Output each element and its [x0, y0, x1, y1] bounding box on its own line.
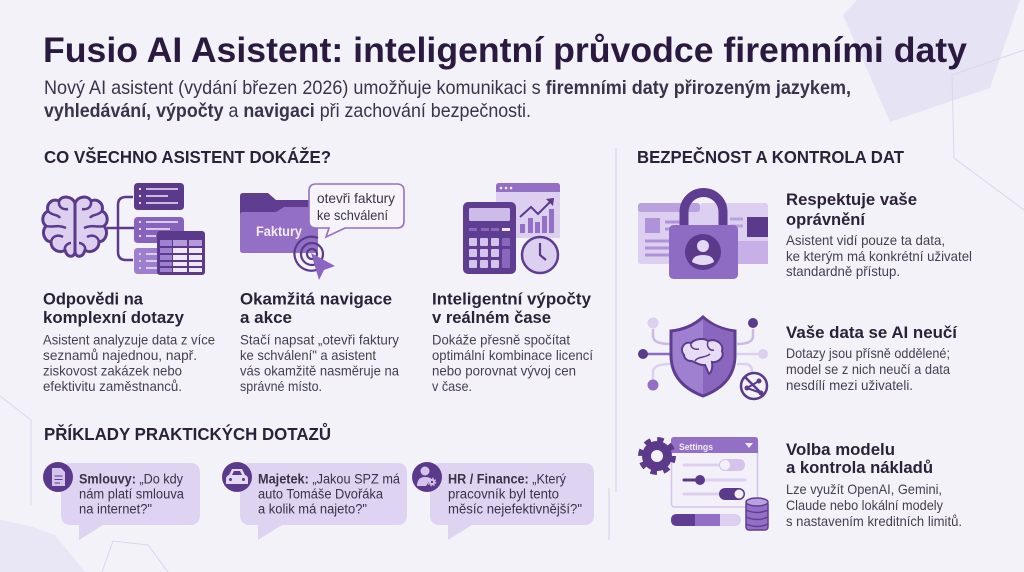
panel: capability 3 text — [432, 290, 593, 394]
callout: assets: Majetek: „Jakou SPZ má — [258, 472, 400, 486]
panel: capability 2 text: vás okamžitě nasměruje na — [240, 364, 399, 378]
panel: data not trained text: model se z nich neučí a data — [786, 362, 950, 377]
intro text — [44, 77, 851, 122]
callout: HR and finance: měsíc nejefektivnější?" — [448, 502, 582, 516]
callout: HR and finance — [412, 462, 594, 540]
icon: padlock with documents — [638, 192, 768, 279]
panel: permissions text: ke kterým má konkrétní uživatel — [786, 249, 972, 264]
panel: data not trained text — [786, 323, 958, 393]
panel: capability 3 text: optimální kombinace licencí — [432, 348, 593, 363]
panel: capability 1 text — [43, 290, 215, 394]
callout: contracts: na internet?" — [79, 502, 152, 516]
panel: capability 1 text: seznamů najednou, např. — [43, 348, 197, 363]
panel: data not trained text: Dotazy jsou přísně oddělené; — [786, 346, 950, 361]
panel: permissions text: Asistent vidí pouze ta data, — [786, 233, 945, 248]
panel: capability 2 text: správné místo. — [240, 379, 322, 394]
panel: capability 3 text: nebo porovnat vývoj cen — [432, 364, 576, 378]
panel: capability 3 text: v reálném čase — [432, 308, 551, 327]
panel: model choice text: s nastavením kreditních limitů. — [786, 514, 962, 529]
icon: folder with speech bubble and cursor: otevři faktury — [317, 190, 395, 206]
panel: permissions text: oprávnění — [786, 210, 866, 229]
callout: HR and finance: pracovník byl tento — [448, 486, 559, 502]
panel: permissions text: Respektuje vaše — [786, 190, 917, 209]
icon: person with gear — [412, 462, 442, 492]
callout: contracts — [43, 462, 200, 540]
panel: model choice text: Volba modelu — [786, 440, 895, 459]
panel: capability 3 text: v čase. — [432, 379, 472, 394]
icon: calculator, chart and clock — [463, 183, 560, 274]
panel: capability 2 text: a akce — [240, 308, 292, 327]
panel: capability 2 text: ke schválení" a asistent — [240, 348, 376, 363]
icon: document — [43, 462, 73, 492]
title: Fusio AI Asistent: inteligentní průvodce firemními daty — [43, 31, 968, 70]
icon: folder with speech bubble and cursor: ke schválení — [317, 207, 388, 223]
panel: permissions text — [786, 190, 972, 279]
panel: model choice text: a kontrola nákladů — [786, 458, 933, 477]
panel: capability 1 text: Asistent analyzuje data z více — [43, 332, 215, 348]
intro text: vyhledávání, výpočty a navigaci při zachování bezpečnosti. — [44, 100, 531, 122]
heading: security: BEZPEČNOST A KONTROLA DAT — [637, 146, 904, 167]
icon: brain with data lists — [43, 183, 205, 275]
icon: car — [222, 462, 252, 492]
callout: contracts: Smlouvy: „Do kdy — [79, 472, 183, 486]
icon: folder with speech bubble and cursor: Faktury — [256, 223, 302, 239]
panel: capability 2 text: Stačí napsat „otevři faktury — [240, 332, 399, 348]
panel: capability 3 text: Dokáže přesně spočítat — [432, 332, 570, 348]
panel: capability 2 text — [240, 290, 399, 394]
panel: data not trained text: nesdílí mezi uživateli. — [786, 378, 913, 393]
panel: model choice text — [786, 440, 962, 529]
callout: HR and finance: HR / Finance: „Který — [448, 472, 566, 486]
panel: capability 1 text: Odpovědi na — [43, 290, 144, 308]
icon: settings window with gear: Settings — [679, 442, 713, 453]
intro text: Nový AI asistent (vydání březen 2026) umožňuje komunikaci s firemními daty přirozeným jazykem, — [44, 77, 851, 99]
heading: examples: PŘÍKLADY PRAKTICKÝCH DOTAZŮ — [44, 422, 331, 444]
callout: contracts: nám platí smlouva — [79, 486, 184, 502]
panel: data not trained text: Vaše data se AI neučí — [786, 323, 958, 342]
panel: capability 1 text: ziskovost zakázek nebo — [43, 364, 182, 378]
icon: settings window with gear — [642, 437, 768, 530]
panel: capability 1 text: komplexní dotazy — [43, 308, 185, 327]
panel: model choice text: Claude nebo lokální modely — [786, 498, 943, 513]
callout: assets — [222, 462, 407, 540]
icon: shield with brain — [638, 317, 768, 399]
icon: folder with speech bubble and cursor — [240, 184, 404, 280]
callout: assets: auto Tomáše Dvořáka — [258, 486, 383, 502]
panel: model choice text: Lze využít OpenAI, Gemini, — [786, 482, 942, 497]
panel: capability 3 text: Inteligentní výpočty — [432, 290, 592, 308]
panel: capability 1 text: efektivitu zaměstnanců. — [43, 379, 182, 394]
callout: assets: a kolik má najeto?" — [258, 502, 367, 516]
panel: permissions text: standardně přístup. — [786, 264, 900, 279]
panel: capability 2 text: Okamžitá navigace — [240, 290, 392, 308]
heading: capabilities: CO VŠECHNO ASISTENT DOKÁŽE? — [44, 146, 331, 167]
